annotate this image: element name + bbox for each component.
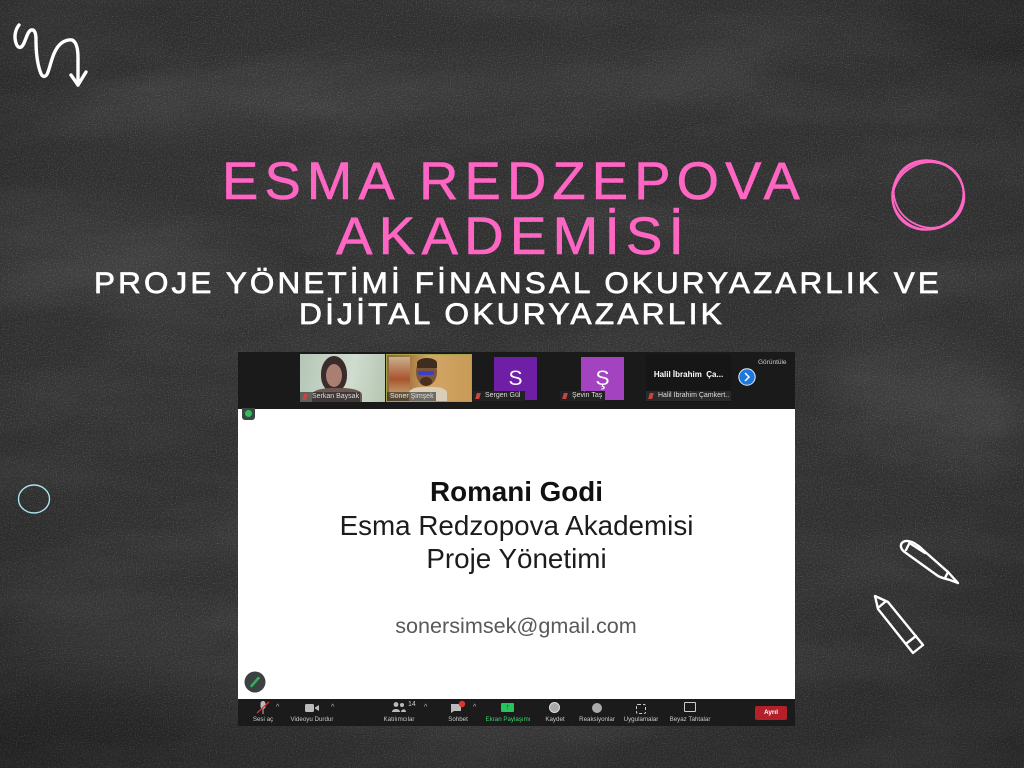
participant: Soner Şimşek: Soner Şimşek (390, 393, 434, 400)
participant: Halil İbrahim Çamkert: Halil İbrahim Ça... (654, 370, 723, 379)
icon: pencil (874, 594, 924, 654)
participant: Sergen Gül: S (508, 367, 522, 390)
record control: Kaydet (545, 716, 565, 723)
participants control: 14 (408, 701, 416, 708)
slide heading: Romani Godi (430, 476, 603, 507)
control toolbar: ^ (276, 704, 279, 711)
apps control: Uygulamalar (624, 716, 658, 723)
reactions control (579, 703, 615, 723)
icon: small blue circle (18, 484, 50, 514)
slide text (340, 476, 693, 574)
slide subtitle: academy: Esma Redzopova Akademisi (340, 510, 693, 540)
share screen control: ↑ (506, 704, 509, 711)
mute control (253, 701, 273, 723)
participants control (384, 701, 416, 723)
share screen control (485, 703, 531, 723)
participant: Serkan Baysak: Serkan Baysak (312, 393, 359, 400)
annotate pencil button (244, 672, 266, 692)
video control: Videoyu Durdur (291, 716, 333, 723)
participants control: Katılımcılar (384, 716, 414, 723)
whiteboard control: Beyaz Tahtalar (670, 716, 710, 723)
participant strip (238, 352, 795, 409)
control toolbar: ^ (331, 704, 334, 711)
apps control (624, 704, 658, 723)
mute control: Sesi aç (253, 716, 273, 723)
view label: Görüntüle (758, 359, 787, 366)
title: AKADEMİSİ (336, 207, 690, 266)
icon: squiggle arrow (13, 23, 88, 87)
control toolbar: ^ (473, 704, 476, 711)
slide email: sonersimsek@gmail.com (395, 613, 637, 638)
share screen control: Ekran Paylaşımı (485, 716, 531, 723)
video control (290, 704, 334, 723)
subtitle: DİJİTAL OKURYAZARLIK (299, 298, 725, 331)
participant: Soner Şimşek (386, 354, 472, 402)
participant: Halil İbrahim Çamkert: Halil İbrahim Çamkert.. (658, 392, 729, 399)
control toolbar: ^ (424, 704, 427, 711)
security badge (242, 408, 255, 420)
zoom screenshot (238, 352, 795, 726)
icon: pen (900, 540, 960, 584)
participant: Halil İbrahim Çamkert (646, 354, 731, 402)
participant: Serkan Baysak (300, 354, 385, 402)
whiteboard control (670, 702, 710, 723)
participant: Şevin Taş (562, 357, 624, 400)
record control (545, 702, 565, 723)
control toolbar (238, 699, 795, 726)
title and subtitle (94, 152, 942, 331)
slide subtitle: project management: Proje Yönetimi (426, 543, 607, 574)
leave button: Ayrıl (764, 709, 778, 716)
participant: Sergen Gül (475, 357, 537, 400)
participant: Şevin Taş: Ş (595, 367, 610, 390)
next arrow button (738, 368, 756, 386)
subtitle (94, 267, 942, 331)
participant: Şevin Taş: Şevin Taş (572, 392, 602, 399)
chat control (448, 700, 468, 723)
chat control: Sohbet (448, 716, 468, 723)
subtitle: PROJE YÖNETİMİ FİNANSAL OKURYAZARLIK VE (94, 267, 942, 300)
participant: Sergen Gül: Sergen Gül (485, 392, 520, 399)
icon: pink hand-drawn circle (891, 159, 966, 231)
reactions control: Reaksiyonlar (579, 716, 615, 723)
title: ESMA REDZEPOVA (222, 152, 806, 211)
title (222, 152, 806, 266)
leave button (755, 706, 787, 720)
